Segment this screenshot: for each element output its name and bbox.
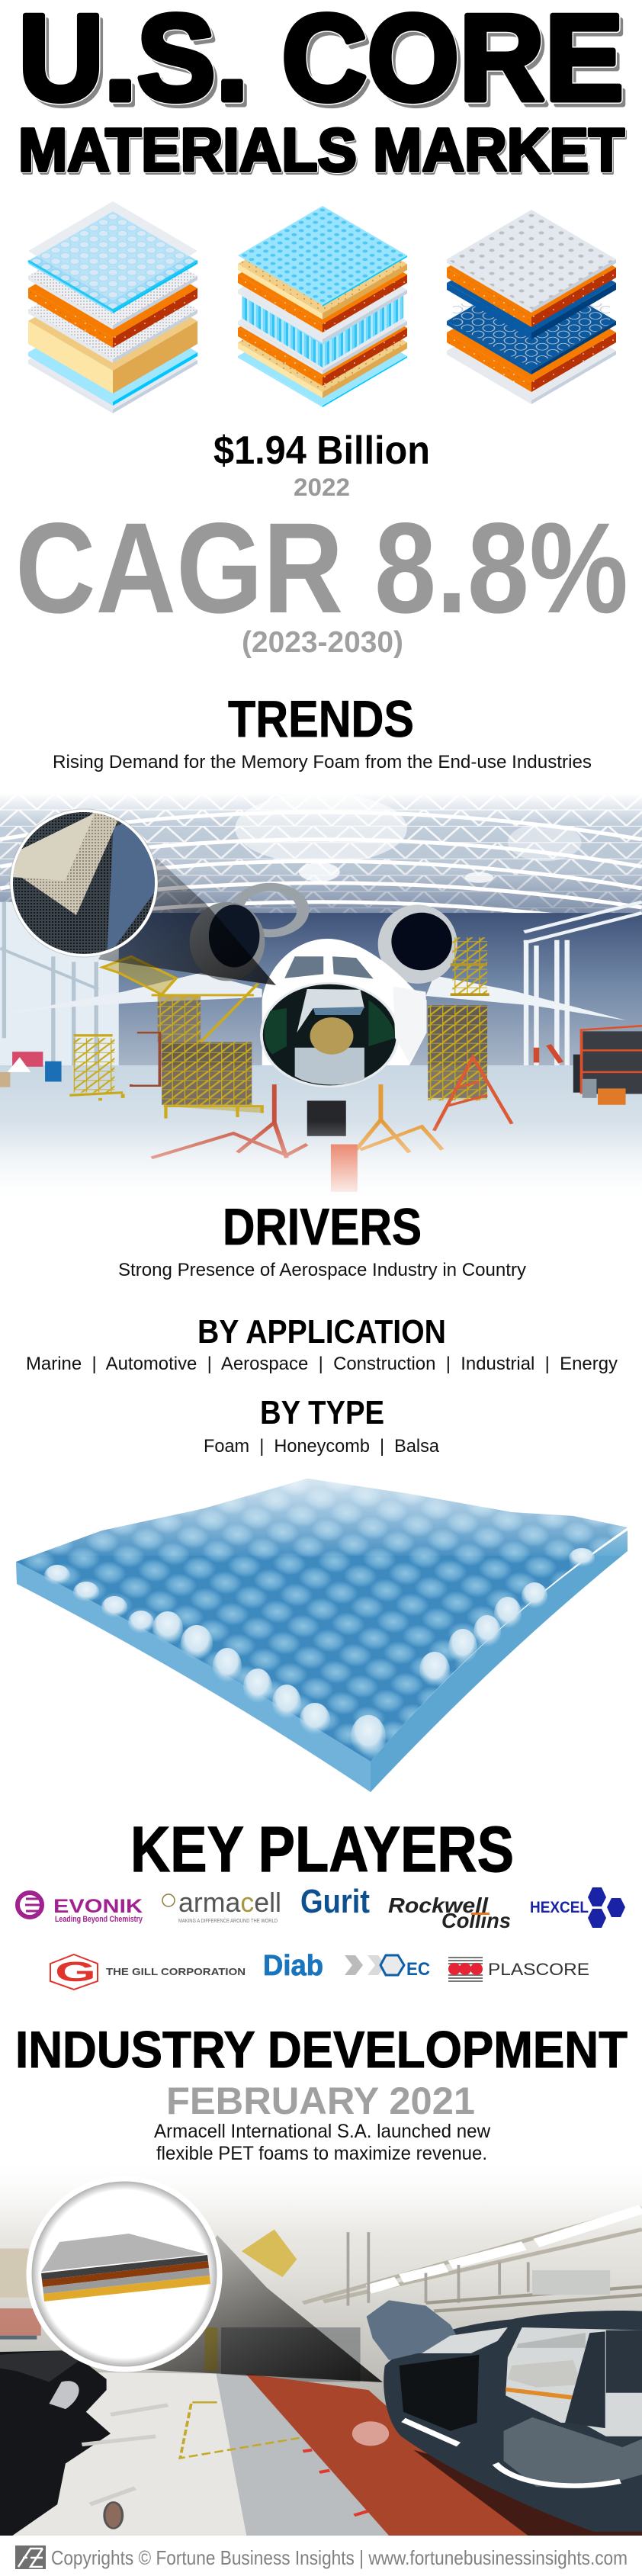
trends text: Rising Demand for the Memory Foam from the End-use Industries (53, 752, 592, 772)
development text: Armacell International S.A. launched new (154, 2121, 491, 2142)
type list: Foam | Honeycomb | Balsa (204, 1436, 440, 1457)
photo: aircraft in hangar (0, 793, 642, 1218)
logo: Rockwell Collins (388, 1893, 511, 1932)
logo: Rockwell Collins: Rockwell (388, 1893, 489, 1917)
shadow cone (98, 858, 276, 985)
magnifier: sandwich panel material (29, 2179, 220, 2369)
logo: Diab: Diab (263, 1950, 323, 1982)
logo: Plascore (448, 1958, 589, 1981)
heading: by application: BY APPLICATION (197, 1313, 446, 1351)
logo: 3A-style EC mark (345, 1955, 430, 1980)
open nose (260, 982, 427, 1087)
icon: layered mattress stack 2 (238, 206, 407, 407)
left engine (190, 887, 303, 981)
development text (154, 2121, 491, 2164)
heading: key players: KEY PLAYERS (130, 1813, 514, 1885)
panel top face (41, 2234, 207, 2272)
icon: layered mattress stack 1 (28, 201, 197, 413)
panel layers (41, 2255, 208, 2280)
footer logo (15, 2545, 46, 2569)
logo: The Gill Corporation: G (55, 1956, 96, 1987)
base year: 2022 (294, 474, 350, 501)
red floor (246, 2374, 532, 2536)
title line 2: MATERIALS MARKET (18, 116, 624, 184)
market size value: $1.94 Billion (213, 429, 430, 473)
magnifier: honeycomb core material (10, 808, 160, 958)
logo: Rockwell Collins: Collins (441, 1909, 511, 1932)
drivers text: Strong Presence of Aerospace Industry in Country (118, 1260, 526, 1280)
development text: flexible PET foams to maximize revenue. (156, 2143, 487, 2164)
logo: Armacell: MAKING A DIFFERENCE AROUND THE WORLD (178, 1919, 278, 1924)
right engine (378, 904, 457, 984)
car door frame and body (367, 2300, 642, 2532)
logo: Hexcel: HEXCEL (530, 1899, 589, 1916)
logo: Armacell: armacell (178, 1887, 281, 1918)
wings (6, 973, 627, 1020)
heading: drivers: DRIVERS (223, 1198, 422, 1256)
ceiling trusses (0, 798, 642, 914)
trolleys (82, 2405, 168, 2529)
heading: by type: BY TYPE (260, 1394, 384, 1431)
forecast period: (2023-2030) (242, 626, 403, 659)
title line 2: MATERIALS MARKET (18, 116, 624, 184)
title line 2: MATERIALS MARKET (20, 118, 626, 186)
logo: Hexcel (530, 1887, 625, 1928)
top fade (0, 2164, 642, 2233)
left scaffold (102, 956, 262, 1119)
application list: Marine | Automotive | Aerospace | Construction | Industrial | Energy (26, 1354, 618, 1374)
grey walkway (217, 2374, 389, 2536)
logo: Gurit: Gurit (300, 1883, 370, 1920)
right shelving (536, 1026, 642, 1105)
left floor (0, 2372, 248, 2536)
cockpit windows (284, 956, 374, 978)
red ladder (434, 1057, 512, 1131)
logo: Plascore: PLASCORE (488, 1960, 589, 1979)
logo: Evonik: Leading Beyond Chemistry (55, 1915, 143, 1924)
hangar walls (0, 902, 642, 1071)
logo: The Gill Corporation: THE GILL CORPORATION (106, 1966, 246, 1977)
floor glare (352, 2421, 389, 2446)
fuselage (262, 939, 427, 1065)
title (18, 0, 628, 186)
heading: trends: TRENDS (228, 690, 414, 748)
floor markings (180, 2402, 368, 2515)
left equipment (0, 1052, 62, 1087)
logo: The Gill Corporation (50, 1954, 246, 1990)
illustration: egg-crate foam sheet (16, 1479, 628, 1792)
dark floor shadow (413, 2450, 642, 2536)
hangar floor (0, 1065, 642, 1171)
factory background (0, 2195, 642, 2406)
shadow cone (123, 2235, 383, 2382)
dashboard foreground (0, 2350, 111, 2536)
nose landing gear (307, 1100, 346, 1136)
front edge highlights (44, 1548, 595, 1758)
logo: 3A-style EC mark: EC (406, 1959, 430, 1980)
right scaffold (428, 937, 490, 1100)
development date: FEBRUARY 2021 (166, 2080, 475, 2122)
logo: Evonik: EVONIK (53, 1896, 143, 1917)
rolling stairs (69, 1033, 159, 1100)
top fade (0, 794, 642, 819)
aircraft jacks (152, 1084, 442, 1158)
gas cylinder (331, 1145, 358, 1192)
photo: automotive assembly line (0, 2161, 642, 2536)
icon: layered mattress stack 3 (447, 210, 616, 404)
footer: copyright (15, 2545, 628, 2569)
bottom fade (0, 1121, 642, 1202)
logo: Evonik (18, 1893, 143, 1924)
